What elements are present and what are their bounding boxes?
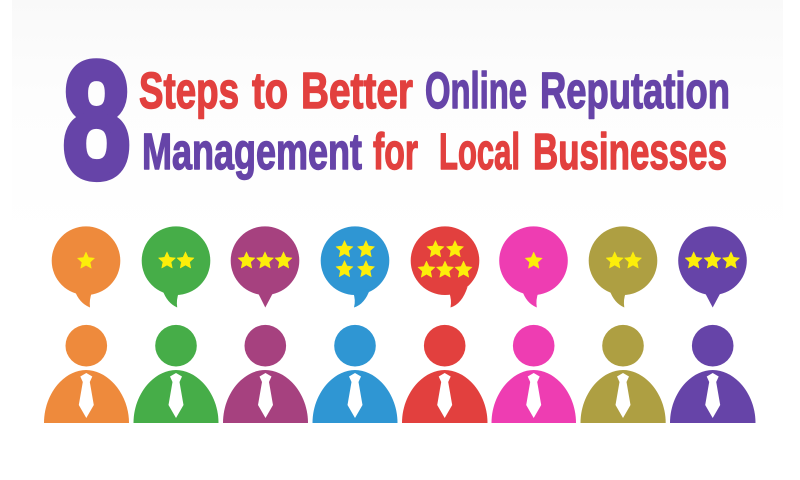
title line 1: Reputation — [540, 62, 730, 119]
title line 2: Local — [439, 123, 520, 180]
person: green — [134, 325, 218, 423]
title line 1: Steps — [139, 62, 239, 119]
speech bubble: violet, 3 stars — [678, 226, 747, 308]
person: orange — [44, 325, 129, 423]
title line 1: to — [252, 62, 288, 119]
speech bubble: orange, 1 star — [52, 226, 120, 308]
person: olive — [580, 325, 666, 423]
person: blue — [312, 325, 398, 423]
speech bubble: plum, 3 stars — [231, 226, 299, 308]
title line 1: Online — [425, 62, 527, 119]
speech bubble: blue, 4 stars — [321, 226, 389, 308]
speech bubble: green, 2 stars — [142, 226, 210, 308]
title line 2 — [142, 123, 727, 180]
person: violet — [670, 325, 756, 423]
person: pink — [492, 325, 576, 423]
speech bubble: red, 5 stars — [411, 226, 479, 308]
person: plum — [223, 325, 308, 423]
title line 1: Better — [301, 62, 413, 119]
speech bubble: olive, 2 stars — [589, 226, 657, 308]
title — [62, 28, 730, 212]
big number 8: 8 — [62, 28, 130, 212]
speech bubble: pink, 1 star — [499, 226, 568, 308]
title line 2: Management — [142, 123, 362, 180]
title line 1 — [139, 62, 730, 119]
person: red — [402, 325, 488, 423]
title line 2: for — [373, 123, 418, 180]
